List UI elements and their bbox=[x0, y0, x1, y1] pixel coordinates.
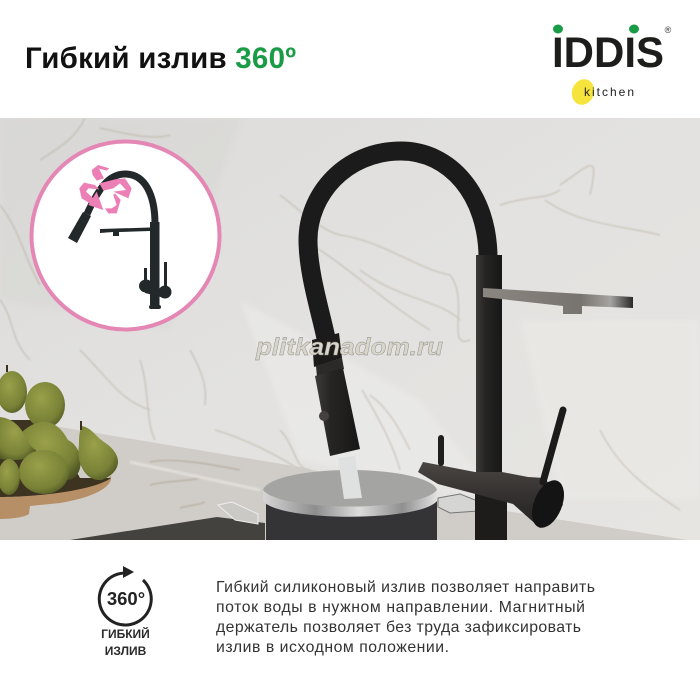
lower column bbox=[475, 490, 507, 540]
logo: IDDIS kitchen bbox=[552, 24, 672, 108]
description text: держатель позволяет без труда зафиксировать bbox=[216, 619, 581, 636]
icon caption: ИЗЛИВ bbox=[105, 644, 147, 658]
shadow behind pears bbox=[0, 420, 111, 497]
sink tap plate bbox=[218, 502, 258, 524]
small lever bbox=[438, 438, 444, 463]
description text: Гибкий силиконовый излив позволяет направить bbox=[216, 579, 595, 596]
description text: излив в исходном положении. bbox=[216, 639, 449, 656]
logo wordmark: IDDIS bbox=[552, 29, 664, 77]
description text bbox=[216, 579, 595, 656]
pot interior bbox=[263, 470, 437, 506]
column bbox=[476, 255, 502, 475]
photo: kitchen scene bbox=[0, 118, 700, 542]
yellow blob bbox=[568, 76, 598, 108]
description text: поток воды в нужном направлении. Магнитный bbox=[216, 599, 585, 616]
pull-out head bbox=[315, 368, 360, 456]
marble wall bbox=[0, 118, 700, 540]
pot bbox=[263, 470, 480, 540]
head connector bbox=[316, 358, 344, 377]
counter veins bbox=[130, 460, 260, 508]
main faucet bbox=[308, 151, 633, 540]
bowl bbox=[0, 476, 111, 519]
head button bbox=[319, 411, 329, 421]
countertop bbox=[0, 427, 700, 542]
filtered water spout bbox=[483, 288, 633, 314]
registered mark: ® bbox=[665, 25, 672, 35]
icon: 360 rotation bbox=[99, 566, 151, 625]
rotation ring bbox=[99, 573, 151, 625]
ring arrowhead bbox=[123, 566, 134, 578]
pot rim bbox=[263, 490, 437, 517]
logo green dots bbox=[553, 24, 639, 34]
pot body bbox=[266, 501, 437, 540]
pears bbox=[0, 371, 27, 413]
inset circle: faucet pictogram bbox=[32, 142, 220, 330]
lever handle bbox=[543, 410, 563, 482]
water stream bbox=[338, 456, 362, 499]
pear stem bbox=[7, 365, 81, 430]
bowl of pears bbox=[0, 365, 118, 519]
360 label: 360° bbox=[107, 588, 145, 609]
marble veins bbox=[0, 118, 680, 510]
pictogram faucet bbox=[68, 174, 172, 309]
pink rotation arrows bbox=[79, 165, 132, 213]
kitchen label: kitchen bbox=[584, 85, 634, 99]
sink bbox=[70, 517, 265, 540]
inset background bbox=[32, 142, 220, 330]
pull-out head collar bbox=[312, 333, 342, 367]
pot handle bbox=[438, 494, 480, 513]
icon caption: ГИБКИЙ bbox=[101, 626, 150, 641]
watermark: plitkanadom.ru bbox=[255, 334, 443, 361]
body end cap bbox=[532, 480, 564, 528]
flexible hose bbox=[308, 151, 488, 338]
mixer body bbox=[418, 462, 563, 528]
marble soft shading bbox=[0, 118, 700, 500]
title: Гибкий излив 360º bbox=[25, 42, 296, 75]
